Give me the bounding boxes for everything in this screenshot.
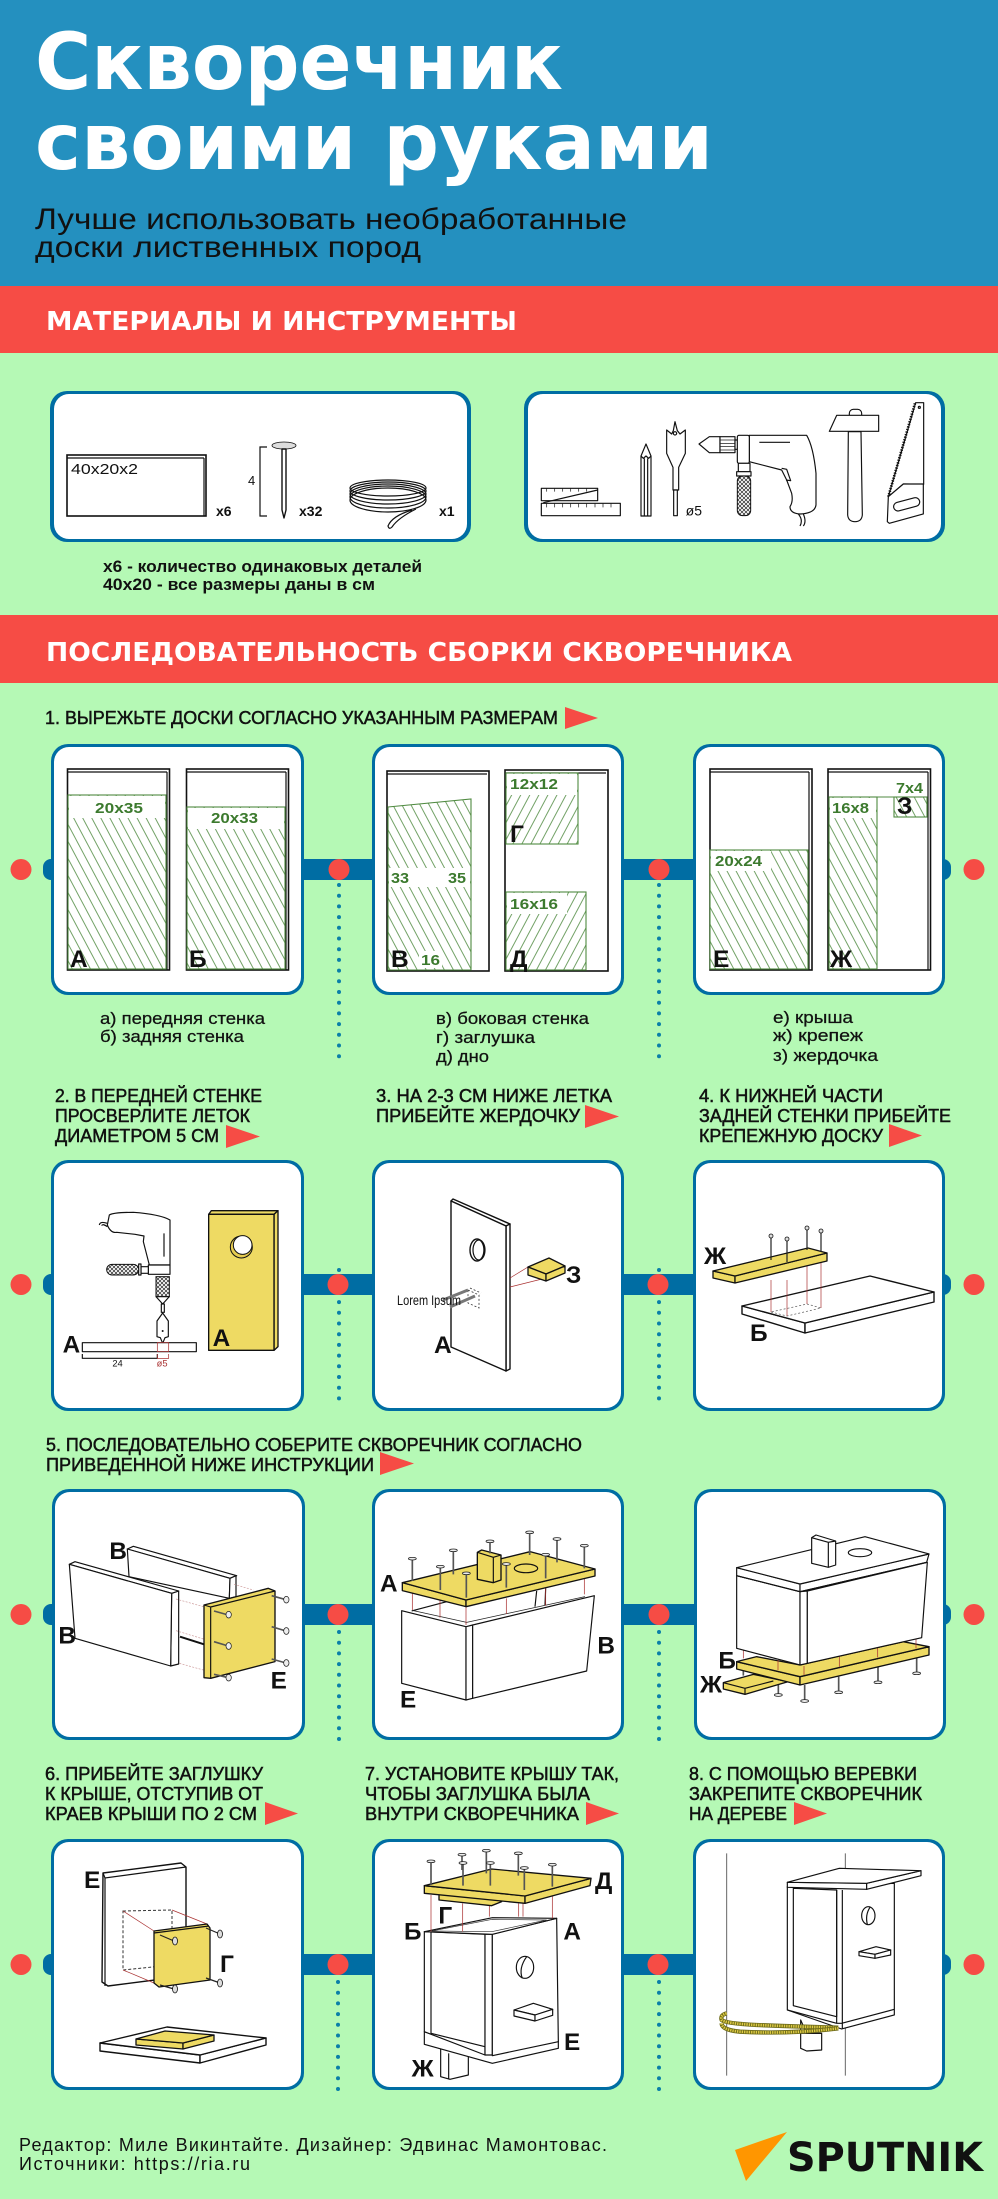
board Г Д: 16x16 <box>510 896 558 913</box>
board А <box>434 1199 510 1371</box>
icon: board <box>67 455 232 519</box>
yellow board Е <box>204 1588 289 1694</box>
captions column 1: б) задняя стенка <box>100 1027 245 1046</box>
icon: hammer <box>829 409 879 522</box>
box walls <box>737 1562 927 1665</box>
panel: step 2 drilling <box>51 1160 304 1411</box>
board Б <box>186 769 288 973</box>
subtitle: доски лиственных пород <box>35 231 421 264</box>
panel: step 5 walls <box>52 1489 305 1740</box>
icon: saw <box>887 403 924 523</box>
icon: rope coil <box>350 480 455 528</box>
red guides <box>771 1260 821 1316</box>
logo: Sputnik: SPUTNIK <box>787 2135 985 2181</box>
roof board Е <box>84 1863 186 1986</box>
board Б <box>742 1276 934 1347</box>
panel: step 4 mounting board <box>693 1160 945 1411</box>
icon: nail: 4 <box>248 473 255 488</box>
board А: А <box>70 946 88 973</box>
panel: cut boards В Г Д <box>372 744 624 995</box>
yellow base: Б <box>718 1647 736 1674</box>
icon: board: 40x20x2 <box>71 461 138 478</box>
roof: А <box>380 1571 398 1598</box>
board А yellow <box>209 1211 278 1352</box>
step 2 heading: ДИАМЕТРОМ 5 СМ <box>55 1125 219 1146</box>
captions column 3: з) жердочка <box>773 1046 879 1065</box>
board Е <box>710 769 812 973</box>
board А edge view: 24 <box>112 1358 123 1368</box>
icon: drill <box>99 1212 170 1343</box>
title: Скворечник <box>35 18 563 108</box>
yellow plug Г <box>123 1910 234 1993</box>
panel: step 7 roof install <box>372 1839 624 2090</box>
box body <box>404 1918 581 2063</box>
header band <box>0 0 998 286</box>
red guides <box>176 1584 253 1670</box>
yellow base <box>718 1638 929 1685</box>
board Ж З: Ж <box>829 946 853 973</box>
captions column 3: е) крыша <box>773 1008 854 1027</box>
legend note: 40x20 - все размеры даны в см <box>103 575 375 594</box>
step 8 heading <box>689 1763 922 1825</box>
captions column 2: г) заглушка <box>436 1028 536 1047</box>
perch: З <box>566 1262 581 1289</box>
rope <box>721 2013 838 2032</box>
step 4 heading: КРЕПЕЖНУЮ ДОСКУ <box>699 1125 883 1146</box>
row 4 connector <box>10 1954 984 2090</box>
section heading: assembly sequence: ПОСЛЕДОВАТЕЛЬНОСТЬ СБОРКИ СКВОРЕЧНИКА <box>46 638 792 668</box>
box body <box>400 1588 615 1713</box>
board Ж З: 16x8 <box>832 800 869 817</box>
subtitle: Лучше использовать необработанные <box>35 203 627 236</box>
row 2 connector <box>10 1270 984 1399</box>
icon: nail: x32 <box>299 503 323 519</box>
step 4 heading: ЗАДНЕЙ СТЕНКИ ПРИБЕЙТЕ <box>699 1105 951 1126</box>
step 8 heading: НА ДЕРЕВЕ <box>689 1803 787 1824</box>
step 6 heading <box>45 1763 298 1825</box>
board Г Д: Г <box>510 821 524 848</box>
step 7 heading: ЧТОБЫ ЗАГЛУШКА БЫЛА <box>365 1783 591 1804</box>
step 3 heading: 3. НА 2-3 СМ НИЖЕ ЛЕТКА <box>376 1085 613 1106</box>
nails <box>769 1226 823 1262</box>
step 6 heading: 6. ПРИБЕЙТЕ ЗАГЛУШКУ <box>45 1763 263 1784</box>
step 2 heading: ПРОСВЕРЛИТЕ ЛЕТОК <box>55 1105 250 1126</box>
title <box>35 18 713 188</box>
back wall В <box>109 1538 237 1644</box>
plank Ж <box>703 1243 827 1283</box>
tree trunk <box>727 1853 845 2076</box>
row 3 connector <box>10 1604 984 1740</box>
step 7 heading <box>365 1763 619 1825</box>
captions column 1: а) передняя стенка <box>100 1009 266 1028</box>
board А: 20x35 <box>95 800 143 817</box>
step 6 heading: КРАЕВ КРЫШИ ПО 2 СМ <box>45 1803 257 1824</box>
yellow board Е: Е <box>271 1667 287 1694</box>
step 8 heading: ЗАКРЕПИТЕ СКВОРЕЧНИК <box>689 1783 922 1804</box>
icon: pencil <box>641 444 651 516</box>
title: своими руками <box>35 98 713 188</box>
bottom stick Ж: Ж <box>411 2056 435 2083</box>
finished roof <box>100 2027 266 2063</box>
step 3 heading: ПРИБЕЙТЕ ЖЕРДОЧКУ <box>376 1105 580 1126</box>
yellow roof and plug <box>424 1868 612 1929</box>
legend note <box>103 557 422 594</box>
yellow plug Г: Г <box>220 1951 234 1978</box>
panel: tools <box>524 391 945 542</box>
footer credits <box>19 2135 607 2174</box>
icon: spade drill bit <box>667 422 702 519</box>
step 1 heading: 1. ВЫРЕЖЬТЕ ДОСКИ СОГЛАСНО УКАЗАННЫМ РАЗМЕРАМ <box>45 707 558 728</box>
front wall В <box>58 1562 179 1666</box>
panel: step 8 tree <box>693 1839 945 2090</box>
row 1 connector <box>10 859 984 1066</box>
board А edge view <box>63 1332 196 1368</box>
subtitle <box>35 203 627 264</box>
board Ж З: З <box>897 793 912 820</box>
icon: ruler <box>541 488 620 516</box>
board Ж З: 7x4 <box>896 780 924 797</box>
captions column 2 <box>436 1009 590 1066</box>
red guides <box>412 1578 584 1625</box>
board Е: Е <box>713 946 729 973</box>
step 4 heading <box>699 1085 951 1147</box>
icon: nail <box>248 442 323 519</box>
step 4 heading: 4. К НИЖНЕЙ ЧАСТИ <box>699 1085 883 1106</box>
board А edge view: А <box>63 1332 80 1359</box>
step 7 heading: ВНУТРИ СКВОРЕЧНИКА <box>365 1803 580 1824</box>
box body: А <box>563 1918 581 1945</box>
panel: step 5 roof <box>372 1489 624 1740</box>
board А yellow: А <box>213 1325 230 1352</box>
label: Lorem Ipsum <box>397 1292 461 1308</box>
board Ж З <box>828 769 930 973</box>
captions column 2: д) дно <box>436 1047 489 1066</box>
board В: В <box>391 946 409 973</box>
board Г Д: 12x12 <box>510 776 558 793</box>
nails <box>408 1531 588 1598</box>
board В: 16 <box>421 952 440 969</box>
nails down <box>743 1657 921 1702</box>
board Е: 20x24 <box>715 853 763 870</box>
front wall В: В <box>58 1623 76 1650</box>
icon: board: x6 <box>216 503 232 519</box>
step 2 heading <box>55 1085 262 1148</box>
panel: cut boards Е Ж З <box>693 744 945 995</box>
roof <box>737 1535 929 1592</box>
board А: А <box>434 1332 452 1359</box>
icon: spade drill bit: ø5 <box>686 503 702 519</box>
board Г Д: Д <box>510 946 528 973</box>
step 5 heading: ПРИВЕДЕННОЙ НИЖЕ ИНСТРУКЦИИ <box>46 1454 374 1475</box>
legend note: x6 - количество одинаковых деталей <box>103 557 422 576</box>
nails <box>427 1849 556 1890</box>
captions column 3: ж) крепеж <box>773 1026 864 1045</box>
yellow roof and plug: Г <box>438 1902 452 1929</box>
board Б: Б <box>189 946 207 973</box>
icon: electric drill <box>699 435 816 526</box>
footer credits: Источники: https://ria.ru <box>19 2154 250 2174</box>
birdhouse <box>787 1868 921 2029</box>
panel: step 3 perch <box>372 1160 624 1411</box>
section heading: assembly sequence <box>0 615 998 683</box>
yellow roof and plug: Д <box>595 1868 612 1895</box>
captions column 2: в) боковая стенка <box>436 1009 590 1028</box>
stick under the birdhouse <box>801 2020 822 2051</box>
plank Ж <box>699 1671 788 1698</box>
board В <box>387 771 489 973</box>
box body: Б <box>404 1918 421 1945</box>
step 6 heading: К КРЫШЕ, ОТСТУПИВ ОТ <box>45 1783 263 1804</box>
step 2 heading: 2. В ПЕРЕДНЕЙ СТЕНКЕ <box>55 1085 262 1106</box>
section heading: materials and tools: МАТЕРИАЛЫ И ИНСТРУМЕНТЫ <box>46 307 517 337</box>
red guides <box>431 1892 552 1932</box>
section heading: materials and tools <box>0 286 998 353</box>
step 5 heading: 5. ПОСЛЕДОВАТЕЛЬНО СОБЕРИТЕ СКВОРЕЧНИК СОГЛАСНО <box>46 1434 582 1455</box>
perch <box>510 1258 581 1289</box>
step 7 heading: 7. УСТАНОВИТЕ КРЫШУ ТАК, <box>365 1763 619 1784</box>
board В: 35 <box>448 870 466 887</box>
board В: 33 <box>391 870 409 887</box>
panel: step 5 base <box>694 1489 946 1740</box>
board Б: Б <box>750 1320 768 1347</box>
board Г Д <box>505 770 608 973</box>
step 8 heading: 8. С ПОМОЩЬЮ ВЕРЕВКИ <box>689 1763 917 1784</box>
back wall В: В <box>109 1538 127 1565</box>
panel: materials <box>50 391 471 542</box>
board Б: 20x33 <box>211 810 258 827</box>
roof board Е: Е <box>84 1867 100 1894</box>
plank Ж: Ж <box>703 1243 727 1270</box>
box body: Е <box>400 1686 416 1713</box>
footer credits: Редактор: Миле Викинтайте. Дизайнер: Эдвинас Мамонтовас. <box>19 2135 607 2155</box>
board А edge view: ø5 <box>157 1358 168 1368</box>
plank Ж: Ж <box>699 1671 723 1698</box>
roof <box>380 1550 595 1607</box>
captions column 3 <box>773 1008 879 1065</box>
board А <box>68 769 170 973</box>
step 3 heading <box>376 1085 619 1128</box>
box body: Е <box>564 2029 580 2056</box>
box body: В <box>597 1632 615 1659</box>
icon: rope coil: x1 <box>439 503 455 519</box>
panel: step 6 plug <box>51 1839 304 2090</box>
step 5 heading <box>46 1434 582 1475</box>
panel: cut boards А Б <box>51 744 304 995</box>
bottom stick Ж <box>411 2048 468 2083</box>
captions column 1 <box>100 1009 266 1046</box>
